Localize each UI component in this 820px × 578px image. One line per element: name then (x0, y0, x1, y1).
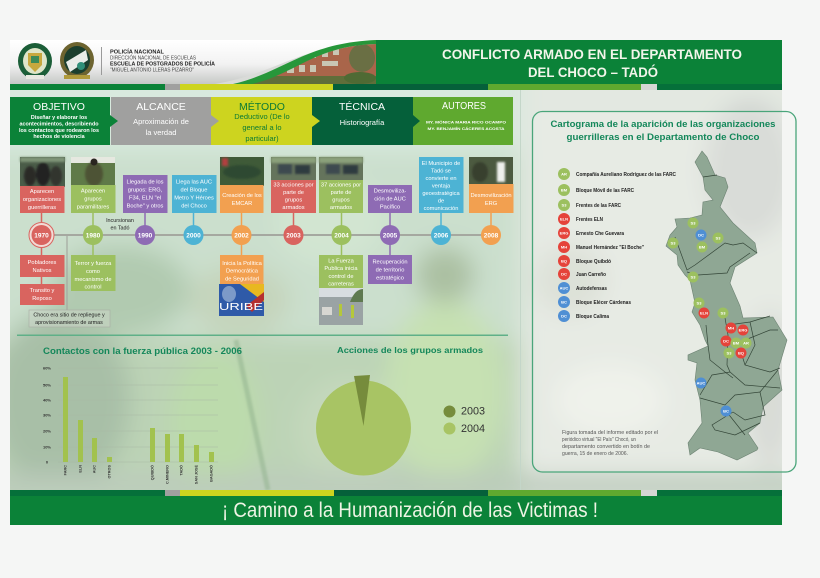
2005: 2005 (383, 232, 398, 240)
background photograph of police officers (10, 90, 782, 490)
2006: 2006 (434, 232, 449, 240)
método: Deductivo (De lo (234, 112, 290, 121)
bar chart: contactos con la fuerza pública: OTROS (108, 465, 112, 479)
método: general a lo (242, 123, 282, 132)
map legend: ERG (560, 230, 568, 236)
alcance: Aproximación de (133, 117, 189, 126)
2006: Tadó se (431, 168, 451, 174)
pie chart: acciones de los grupos armados (316, 345, 485, 476)
institution name: POLICÍA NACIONAL (110, 48, 164, 56)
2005 (368, 185, 412, 284)
map markers (668, 218, 752, 416)
note: incursionan en Tadó (106, 218, 134, 232)
2002: Inicia la Política (222, 261, 263, 267)
map markers: ERG (739, 328, 747, 332)
1970: 1970 (34, 232, 49, 240)
1980: como (86, 269, 100, 275)
1970: Aparecen (30, 189, 54, 195)
alcance (111, 97, 219, 145)
map legend: S3 (562, 202, 567, 208)
map legend: BM (561, 188, 568, 192)
map legend: AUC (560, 286, 568, 290)
bar chart: contactos con la fuerza pública: Contactos con la fuerza pública 2003 - 2006 (43, 346, 242, 357)
map legend: Compañía Aureliano Rodríguez de las FARC (576, 172, 676, 178)
map legend: Frentes ELN (576, 217, 603, 223)
2003: 33 acciones por (273, 182, 314, 188)
map source note: Figura tomada del informe editado por el (562, 430, 658, 436)
1970: Pobladores (28, 260, 57, 266)
2002: Democrática (226, 268, 259, 274)
1970: Nativos (33, 268, 52, 274)
photo: vehicles (271, 157, 316, 180)
2005: Desmoviliza- (374, 188, 406, 194)
map legend: Frentes de las FARC (576, 203, 621, 209)
bar chart: contactos con la fuerza pública: 10% (43, 444, 51, 450)
2006 (419, 157, 464, 245)
autores: AUTORES (442, 100, 486, 112)
title: DEL CHOCO – TADÓ (528, 63, 658, 80)
institution name (110, 48, 215, 74)
map legend: Bloque Elécer Cárdenas (576, 300, 631, 306)
map markers: AUC (697, 380, 705, 386)
institution name: DIRECCIÓN NACIONAL DE ESCUELAS (110, 54, 197, 62)
alcance: la verdad (146, 128, 176, 137)
bar chart: contactos con la fuerza pública: SAN JOSÉ (194, 465, 198, 484)
map legend: Bloque Calima (576, 314, 609, 320)
objetivo: hechos de violencia (33, 134, 86, 140)
institution name: "MIGUEL ANTONIO LLERAS PIZARRO" (110, 68, 194, 74)
photo: paramilitary (71, 157, 115, 186)
bar chart: contactos con la fuerza pública: 60% (43, 366, 51, 370)
map markers: DC (723, 338, 729, 344)
map markers: S3 (691, 220, 696, 226)
map markers: S3 (697, 300, 702, 306)
técnica: Historiografía (340, 118, 385, 127)
map markers: S3 (716, 236, 721, 240)
método (211, 97, 320, 145)
bar chart: contactos con la fuerza pública: TADÓ (178, 465, 184, 475)
2002: EMCAR (232, 201, 252, 207)
research summary banner (10, 97, 513, 145)
2004: parte de (331, 190, 351, 196)
2003: parte de (283, 190, 304, 196)
2002: de Seguridad (225, 276, 259, 282)
2003: grupos (285, 198, 302, 204)
2002: 2002 (234, 232, 249, 240)
map markers: S3 (721, 310, 726, 316)
callout: Choco repliegue: aprovisionamiento de armas (35, 320, 103, 326)
note: incursionan en Tadó: Incursionan (106, 218, 134, 224)
1970: Transito y (30, 288, 55, 294)
método: MÉTODO (239, 100, 285, 113)
timeline (20, 157, 514, 327)
2006: de (438, 198, 444, 204)
callout: Choco repliegue (29, 310, 110, 327)
pie chart: acciones de los grupos armados: Acciones de los grupos armados (337, 345, 483, 355)
autores: MY. MÓNICA MARIA RICO OCAMPO (426, 120, 506, 124)
2006: El Municipio de (422, 161, 460, 167)
2004: 37 acciones por (321, 182, 361, 188)
map markers: BC (723, 408, 729, 414)
2003: armados (282, 205, 305, 211)
map legend: BC (561, 300, 567, 304)
2006: convierte en (426, 176, 456, 182)
2004: carreteras (328, 282, 354, 288)
autores: MY. BENJAMÍN CÁCERES ACOSTA (428, 126, 505, 131)
bar chart: contactos con la fuerza pública: BAGADÓ (208, 465, 214, 482)
map markers: MH (728, 326, 734, 330)
map legend: ELN (560, 216, 568, 222)
2006: geoestratégica (422, 191, 460, 197)
footer banner (10, 490, 782, 525)
map legend: Bloque Móvil de las FARC (576, 188, 634, 194)
bar chart: contactos con la fuerza pública: QUIBDÓ (150, 465, 154, 480)
1980: mecanismo de (74, 277, 112, 283)
seal: Escuela de Postgrados (60, 42, 94, 79)
1980: grupos (84, 196, 102, 202)
photo: Uribe campaign (219, 284, 264, 316)
2008: Desmovilización (470, 193, 512, 199)
2005: ción de AUC (374, 196, 406, 202)
map markers: S3 (727, 350, 732, 356)
bar chart: contactos con la fuerza pública: AUC (92, 465, 96, 473)
técnica (312, 97, 420, 145)
panel: cartograma (532, 112, 796, 472)
map legend: AR (561, 172, 567, 176)
2000: 2000 (186, 232, 201, 240)
bar chart: contactos con la fuerza pública: C.MINERO (166, 465, 170, 484)
note: incursionan en Tadó: en Tadó (110, 226, 130, 232)
2008: ERG (485, 201, 497, 207)
map legend: Manuel Hernández "El Boche" (576, 245, 644, 251)
panel heading: Cartograma de la aparición de las organizaciones (550, 119, 776, 130)
vest strap in photo (236, 340, 268, 490)
2004: 2004 (334, 232, 349, 240)
1980: control (84, 284, 102, 290)
map legend: BQ (561, 258, 567, 264)
1980: 1980 (86, 232, 101, 240)
map markers: S3 (691, 274, 696, 280)
1970: organizaciones (23, 197, 61, 203)
1990: Boche" y otros (127, 204, 164, 210)
2000: del Choco (181, 204, 207, 210)
2005: de territorio (376, 268, 404, 274)
photo: road checkpoint (319, 288, 363, 325)
objetivo: acontecimientos, describiendo (19, 122, 99, 128)
seal: Policía Nacional (18, 43, 52, 79)
2000: del Bloque (181, 188, 207, 194)
2003 (271, 157, 316, 245)
photo: Uribe campaign: URIBE (219, 301, 263, 313)
2004 (319, 157, 363, 325)
2000 (172, 175, 216, 245)
footer banner: ¡ Camino a la Humanización de las Victimas ! (222, 499, 598, 522)
1970: Reposo (32, 296, 52, 302)
1990 (123, 175, 168, 245)
map of Chocó (666, 151, 787, 460)
bar chart: contactos con la fuerza pública: FARC (64, 465, 68, 475)
1990: Llegada de los (126, 180, 164, 186)
1990: grupos: ERG, (128, 188, 163, 194)
2008: 2008 (484, 232, 499, 240)
2005: Recuperación (372, 260, 408, 266)
map legend: DC (561, 272, 567, 276)
2003: 2003 (286, 232, 301, 240)
header (10, 40, 782, 84)
title (442, 46, 742, 80)
1990: F34, ELN "el (129, 196, 161, 202)
objetivo: Diseñar y elaborar los (31, 115, 87, 121)
bar chart: contactos con la fuerza pública: 0 (46, 460, 49, 464)
objetivo: OBJETIVO (33, 101, 85, 113)
2002 (219, 157, 264, 316)
panel heading (550, 119, 776, 143)
objetivo: los contactos que rodearon los (19, 128, 99, 134)
autores (413, 97, 513, 145)
2004: Publica inicia (324, 266, 358, 272)
2004: armados (330, 205, 352, 211)
2004: control de (329, 274, 353, 280)
map source note: departamento convertido en botín de (562, 444, 650, 450)
map legend: Autodefensas (576, 286, 607, 292)
map markers: DC (698, 232, 704, 238)
header colour stripe (10, 84, 782, 90)
map source note: periódico virtual "El País" Chocó, un (562, 437, 636, 443)
pie legend: 2003 (461, 406, 485, 418)
alcance: ALCANCE (136, 101, 186, 113)
técnica: TÉCNICA (339, 100, 385, 113)
pie legend: 2004 (461, 423, 485, 435)
title: CONFLICTO ARMADO EN EL DEPARTAMENTO (442, 46, 742, 62)
bar chart: contactos con la fuerza pública: 20% (43, 428, 51, 434)
map markers: S3 (671, 240, 676, 246)
2004: grupos (332, 198, 350, 204)
panel heading: guerrilleras en el Departamento de Choco (566, 132, 760, 143)
1990: 1990 (138, 232, 153, 240)
map legend (558, 168, 676, 322)
pie legend (444, 406, 485, 435)
photo: vehicles (319, 157, 363, 180)
map markers: ELN (700, 310, 708, 316)
map markers: BQ (738, 350, 744, 356)
bar chart: contactos con la fuerza pública: 50% (43, 382, 51, 388)
1980: Aparecen (81, 188, 105, 194)
2005: Pacífico (380, 204, 400, 210)
2008 (469, 157, 514, 245)
map markers: BM (733, 340, 740, 346)
map legend: Juan Carreño (576, 272, 606, 278)
2000: Llega las AUC (176, 180, 212, 186)
map legend: DC (561, 314, 567, 318)
2004: La Fuerza (328, 258, 355, 264)
map source note (562, 430, 658, 457)
2006: comunicación (424, 206, 458, 212)
map legend: MH (561, 244, 567, 250)
building photograph with green swoosh (215, 40, 376, 84)
map markers: AR (743, 340, 749, 346)
map legend: Bloque Quibdó (576, 259, 611, 265)
institution name: ESCUELA DE POSTGRADOS DE POLICÍA (110, 60, 215, 68)
1970 (20, 157, 65, 305)
2006: ventaja (432, 184, 451, 190)
bar chart: contactos con la fuerza pública: 30% (43, 412, 51, 418)
map markers: BM (699, 244, 706, 250)
1980 (71, 157, 116, 291)
map legend: Ernesto Che Guevara (576, 231, 624, 237)
photo: soldiers (220, 157, 264, 186)
1980: Terror y fuerza (75, 261, 112, 267)
objetivo (10, 97, 118, 145)
callout: Choco repliegue: Choco era sitio de repliegue y (33, 312, 105, 318)
photo: guerrilla group (20, 157, 65, 187)
2002: Creación de los (222, 193, 262, 199)
1970: guerrilleras (28, 205, 56, 211)
panel divider line (520, 90, 522, 490)
map source note: guerra, 15 de enero de 2006. (562, 451, 628, 457)
1980: paramilitares (77, 204, 109, 210)
método: particular) (245, 134, 279, 143)
2005: estratégico (376, 276, 404, 282)
bar chart: contactos con la fuerza pública: 40% (43, 398, 51, 402)
bar chart: contactos con la fuerza pública (43, 346, 242, 484)
photo: demobilization (469, 157, 513, 184)
bar chart: contactos con la fuerza pública: ELN (78, 465, 82, 473)
2000: Metro Y Héroes (174, 196, 214, 202)
